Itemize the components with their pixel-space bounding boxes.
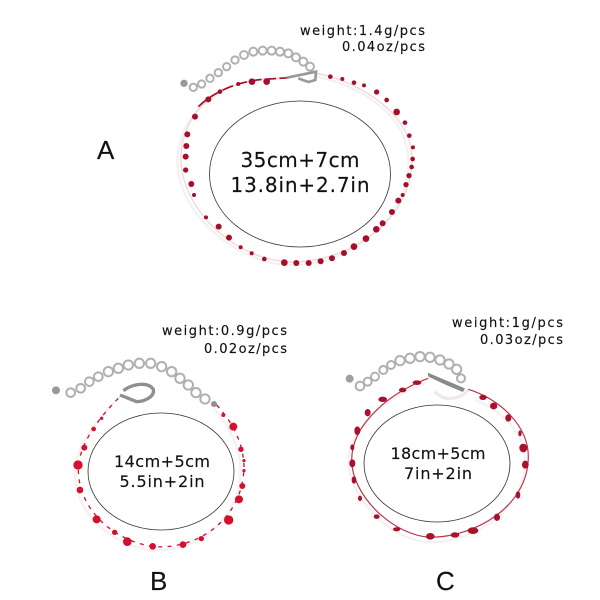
label A: A: [97, 135, 115, 165]
weight text C: weight:1g/pcs: [452, 316, 563, 331]
size text B: 5.5in+2in: [120, 472, 204, 491]
size ellipse B: [88, 413, 234, 530]
weight text B: [162, 324, 287, 357]
bracelet B beads and chain: [52, 359, 246, 550]
size ellipse A: [210, 101, 390, 247]
panel: bracelet B: [52, 324, 287, 596]
size text C: 18cm+5cm: [390, 444, 486, 463]
necklace A beads and chain: [178, 47, 415, 266]
size text A: 13.8in+2.7in: [230, 173, 370, 197]
bracelet C beads and chain: [346, 352, 529, 542]
weight text A: weight:1.4g/pcs: [300, 24, 425, 39]
size ellipse C: [364, 405, 510, 522]
weight text C: 0.03oz/pcs: [480, 333, 563, 348]
size text C: [390, 444, 486, 483]
label C: C: [436, 566, 455, 596]
weight text C: [452, 316, 563, 348]
size text A: [230, 148, 370, 197]
weight text A: [300, 24, 425, 55]
label B: B: [150, 566, 167, 596]
panel: necklace A: [97, 24, 425, 266]
panel: bracelet C: [346, 316, 563, 596]
size text B: 14cm+5cm: [114, 452, 210, 471]
weight text B: 0.02oz/pcs: [204, 342, 287, 357]
weight text A: 0.04oz/pcs: [342, 40, 425, 55]
weight text B: weight:0.9g/pcs: [162, 324, 287, 339]
size text C: 7in+2in: [404, 464, 472, 483]
size text A: 35cm+7cm: [240, 148, 360, 172]
size text B: [114, 452, 210, 491]
